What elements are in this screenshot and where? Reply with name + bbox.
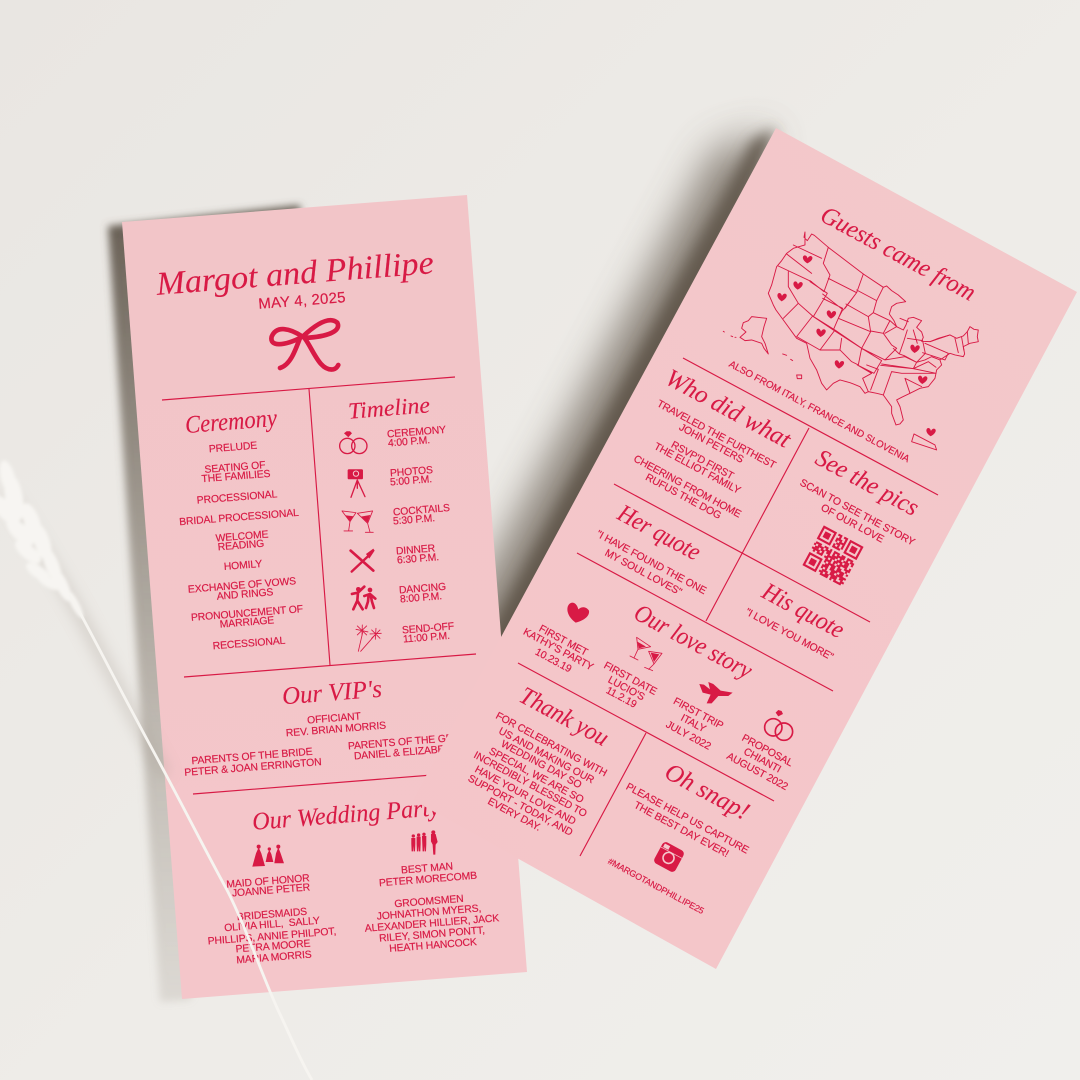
ceremony order list: RECESSIONAL bbox=[212, 636, 286, 652]
party names right bbox=[364, 861, 500, 955]
grass shadow bbox=[8, 495, 165, 775]
timeline entries: 5:30 P.M. bbox=[393, 513, 435, 527]
heading: her quote: Her quote bbox=[612, 499, 705, 566]
icon: bridesmaids bbox=[252, 845, 284, 867]
proposal text: PROPOSAL bbox=[740, 733, 795, 769]
first met text: FIRST MET bbox=[537, 623, 590, 659]
first trip text bbox=[664, 696, 725, 753]
party names left bbox=[207, 873, 337, 966]
quote text: "I HAVE FOUND THE ONE bbox=[594, 529, 708, 597]
decorative dried grass bbox=[0, 459, 312, 1080]
proposal text bbox=[725, 733, 795, 793]
chart: US map bbox=[723, 232, 978, 450]
panel: our love story bbox=[521, 599, 795, 793]
quote text: MY SOUL LOVES" bbox=[603, 548, 684, 598]
heading: see the pics: See the pics bbox=[811, 444, 923, 522]
awards list: TRAVELED THE FURTHEST bbox=[655, 399, 778, 472]
icon: cocktails bbox=[342, 511, 373, 532]
icon: bow bbox=[271, 320, 338, 369]
quote text: "I LOVE YOU MORE" bbox=[743, 607, 835, 663]
ceremony order list: PRONOUNCEMENT OF bbox=[191, 604, 303, 624]
heading: oh snap: Oh snap! bbox=[660, 758, 754, 826]
timeline entries: PHOTOS bbox=[390, 465, 433, 479]
party names right: HEATH HANCOCK bbox=[389, 937, 477, 955]
timeline entries: 11:00 P.M. bbox=[403, 631, 450, 645]
timeline entries: DINNER bbox=[396, 543, 436, 557]
first trip text: JULY 2022 bbox=[664, 719, 713, 753]
card sheet bbox=[413, 128, 1077, 969]
ceremony order list: PRELUDE bbox=[209, 441, 258, 455]
heading: timeline: Timeline bbox=[347, 392, 431, 424]
icon: groomsmen bbox=[411, 830, 438, 855]
icon: dancers bbox=[352, 587, 375, 609]
party names left: MAID OF HONOR bbox=[226, 873, 311, 891]
awards list: JOHN PETERS bbox=[677, 422, 745, 466]
timeline entries: 6:30 P.M. bbox=[397, 552, 439, 566]
ceremony order list: HOMILY bbox=[223, 559, 263, 573]
first date text: 11.2.19 bbox=[604, 685, 638, 711]
timeline entries: 5:00 P.M. bbox=[390, 474, 432, 488]
icon: instagram camera bbox=[653, 841, 685, 873]
panel: ceremony bbox=[179, 405, 303, 652]
icon: cocktails bbox=[630, 637, 662, 671]
party names left: PETRA MOORE bbox=[235, 939, 311, 955]
party names right: BEST MAN bbox=[401, 861, 453, 877]
panel: oh snap bbox=[606, 758, 754, 916]
heading: his quote: His quote bbox=[757, 578, 849, 644]
VIP names: DANIEL & ELIZABETH bbox=[354, 743, 458, 762]
party names left: MARIA MORRIS bbox=[236, 950, 312, 966]
scan instructions: SCAN TO SEE THE STORY bbox=[798, 478, 916, 548]
date: MAY 4, 2025 bbox=[258, 289, 346, 313]
panel: his quote bbox=[743, 578, 849, 663]
VIP names: PARENTS OF THE BRIDE bbox=[191, 747, 313, 767]
VIP names bbox=[184, 711, 478, 779]
panel: timeline bbox=[340, 392, 454, 651]
party names left: PHILLIPS, ANNIE PHILPOT, bbox=[207, 926, 337, 948]
thank you message: FOR CELEBRATING WITH bbox=[494, 711, 608, 779]
heading: our love story: Our love story bbox=[629, 599, 757, 685]
first date text: FIRST DATE bbox=[602, 660, 659, 698]
awards list bbox=[631, 399, 778, 522]
right program card bbox=[413, 128, 1077, 969]
awards list: CHEERING FROM HOME bbox=[631, 454, 743, 520]
left program card bbox=[122, 195, 527, 999]
heading: who did what: Who did what bbox=[661, 364, 796, 454]
awards list: RUFUS THE DOG bbox=[643, 472, 723, 522]
party names right: RILEY, SIMON PONTT, bbox=[379, 925, 485, 945]
Hawaii bbox=[783, 354, 802, 379]
party names right: JOHNATHON MYERS, bbox=[376, 903, 482, 923]
icon: airplane bbox=[699, 682, 733, 703]
thank you message: WEDDING DAY SO bbox=[499, 739, 583, 791]
thank you message: INCREDIBLY BLESSED TO bbox=[472, 750, 588, 820]
timeline entries: CEREMONY bbox=[387, 425, 447, 440]
first met text: KATHY'S PARTY bbox=[521, 627, 595, 673]
card sheet bbox=[122, 195, 527, 999]
note: other countries: ALSO FROM ITALY, FRANCE AND SLOVENIA bbox=[727, 359, 912, 465]
panel: who did what bbox=[631, 364, 796, 522]
party names right: PETER MORECOMB bbox=[379, 871, 478, 889]
thank you message: SPECIAL, WE ARE SO bbox=[487, 746, 585, 806]
photo request: THE BEST DAY EVER! bbox=[632, 800, 730, 860]
timeline entries bbox=[387, 425, 454, 645]
Puerto Rico bbox=[912, 434, 937, 450]
icon: heart bbox=[567, 603, 589, 623]
awards list: RSVP'D FIRST bbox=[669, 440, 736, 483]
icon: rings bbox=[765, 710, 793, 740]
heading: thank you: Thank you bbox=[515, 682, 613, 752]
timeline entries: 8:00 P.M. bbox=[400, 591, 442, 605]
icon: sparklers bbox=[356, 625, 381, 651]
panel: thank you bbox=[466, 682, 613, 839]
icon: wedding rings bbox=[340, 431, 367, 454]
heading: guests came from: Guests came from bbox=[816, 201, 980, 307]
ceremony order list: AND RINGS bbox=[216, 587, 274, 603]
heading: ceremony: Ceremony bbox=[184, 405, 279, 439]
panel: her quote bbox=[594, 499, 708, 598]
grass head bbox=[0, 459, 86, 620]
heading: wedding party: Our Wedding Party bbox=[251, 794, 442, 836]
timeline entries: COCKTAILS bbox=[393, 503, 450, 518]
Alaska bbox=[723, 317, 768, 354]
grass stem bbox=[70, 595, 312, 1080]
hashtag: #MARGOTANDPHILLIPE25 bbox=[606, 856, 706, 916]
proposal text: CHIANTI bbox=[741, 747, 783, 775]
timeline entries: SEND-OFF bbox=[402, 621, 454, 636]
divider lines bbox=[518, 358, 938, 856]
first met text: 10.23.19 bbox=[533, 647, 573, 675]
timeline entries: DANCING bbox=[399, 582, 446, 596]
shadow of right card bbox=[400, 128, 776, 850]
names title: Margot and Phillipe bbox=[154, 245, 435, 303]
VIP names: REV. BRIAN MORRIS bbox=[286, 721, 387, 739]
VIP names: PETER & JOAN ERRINGTON bbox=[184, 757, 322, 779]
panel: wedding party bbox=[207, 794, 500, 966]
thank you message: HAVE YOUR LOVE AND bbox=[473, 764, 577, 828]
ceremony order list: THE FAMILIES bbox=[201, 469, 271, 485]
ceremony order list: READING bbox=[217, 539, 265, 553]
ceremony order list: BRIDAL PROCESSIONAL bbox=[179, 508, 299, 528]
party names left: OLIVIA HILL, SALLY bbox=[224, 916, 320, 934]
ceremony order list: EXCHANGE OF VOWS bbox=[188, 576, 297, 596]
ceremony order list: SEATING OF bbox=[204, 460, 266, 476]
divider lines bbox=[162, 377, 476, 794]
icon: camera on tripod bbox=[348, 469, 365, 497]
panel: see the pics bbox=[798, 444, 923, 587]
VIP names: OFFICIANT bbox=[307, 711, 362, 727]
ceremony order list: WELCOME bbox=[215, 529, 269, 545]
map outline bbox=[768, 232, 978, 425]
icon: knife and fork bbox=[351, 549, 375, 572]
state borders bbox=[778, 245, 968, 395]
panel: our VIPs bbox=[184, 676, 478, 779]
ceremony order list bbox=[179, 441, 303, 652]
photo request: PLEASE HELP US CAPTURE bbox=[624, 782, 750, 857]
shadow of left card bbox=[108, 205, 320, 1002]
first date text: LUCIO'S bbox=[606, 675, 646, 703]
proposal text: AUGUST 2022 bbox=[725, 751, 790, 793]
first trip text: ITALY bbox=[679, 713, 708, 735]
scan instructions: OF OUR LOVE bbox=[819, 503, 885, 545]
hearts on states bbox=[777, 255, 936, 436]
ceremony order list: MARRIAGE bbox=[219, 615, 275, 631]
heading: our VIPs: Our VIP's bbox=[281, 676, 383, 710]
thank you message: US AND MAKING OUR bbox=[497, 726, 596, 786]
first trip text: FIRST TRIP bbox=[671, 696, 725, 732]
party names right: GROOMSMEN bbox=[394, 894, 464, 910]
thank you message: SUPPORT - TODAY, AND bbox=[466, 773, 574, 839]
thank you message bbox=[466, 711, 608, 839]
party names right: ALEXANDER HILLIER, JACK bbox=[364, 913, 500, 935]
awards list: THE ELLIOT FAMILY bbox=[652, 441, 742, 497]
party names left: BRIDESMAIDS bbox=[237, 907, 308, 923]
timeline entries: 4:00 P.M. bbox=[388, 435, 430, 449]
VIP names: PARENTS OF THE GROOM bbox=[348, 731, 478, 752]
party names left: JOANNE PETER bbox=[232, 882, 311, 900]
QR code bbox=[802, 525, 864, 587]
ceremony order list: PROCESSIONAL bbox=[196, 489, 278, 507]
thank you message: EVERY DAY. bbox=[486, 796, 542, 834]
